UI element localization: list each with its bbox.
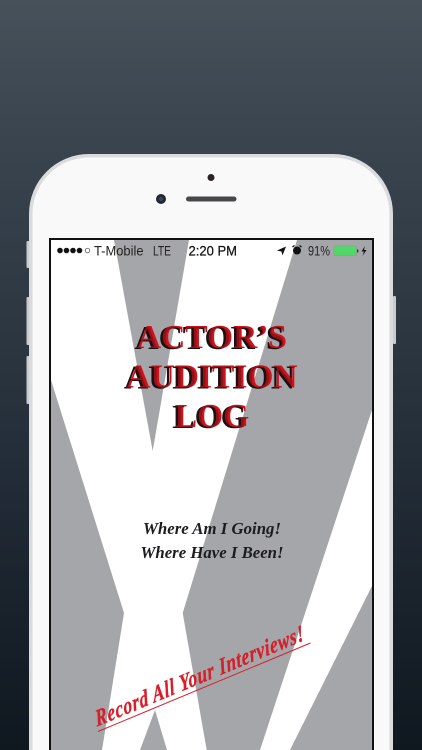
- slogan text: Record All Your Interviews!: [92, 619, 306, 732]
- screen base: [51, 240, 372, 750]
- charging bolt: [362, 246, 366, 256]
- title red layer: ACTOR’S: [137, 319, 287, 356]
- phone edge: [29, 154, 393, 750]
- grey background shapes: [51, 240, 372, 750]
- carrier: T-Mobile: [94, 244, 144, 258]
- title shadow layer: LOG: [172, 399, 247, 436]
- title red layer: AUDITION: [126, 358, 298, 396]
- title dark front layer: [124, 320, 295, 436]
- battery percent: 91%: [308, 244, 330, 258]
- network: LTE: [153, 244, 171, 258]
- location icon: [277, 246, 286, 256]
- phone: [26, 154, 396, 750]
- title shadow layer: ACTOR’S: [134, 320, 285, 357]
- title shadow layer: [124, 320, 295, 436]
- title shadow layer: AUDITION: [124, 360, 295, 396]
- battery icon: [334, 246, 358, 256]
- title dark front layer: AUDITION: [124, 360, 295, 396]
- title red layer: LOG: [175, 398, 249, 435]
- tagline: Where Have I Been!: [140, 543, 284, 562]
- front camera: [156, 194, 166, 204]
- signal dots: [57, 248, 90, 253]
- title red layer: [126, 319, 298, 435]
- side buttons: [26, 241, 396, 404]
- title dark front layer: ACTOR’S: [134, 320, 285, 357]
- screen: [50, 239, 373, 750]
- status bar: [57, 244, 366, 258]
- speaker: [186, 196, 236, 202]
- title: [124, 319, 298, 436]
- red slogan: [92, 619, 310, 732]
- slogan underline: [98, 643, 310, 732]
- title dark front layer: LOG: [172, 399, 247, 436]
- alarm icon: [292, 246, 302, 254]
- tagline: [140, 519, 284, 562]
- time: 2:20 PM: [188, 244, 237, 258]
- phone face: [32, 158, 390, 750]
- screen border: [50, 239, 373, 750]
- tagline: Where Am I Going!: [143, 519, 281, 538]
- front sensor: [208, 174, 214, 181]
